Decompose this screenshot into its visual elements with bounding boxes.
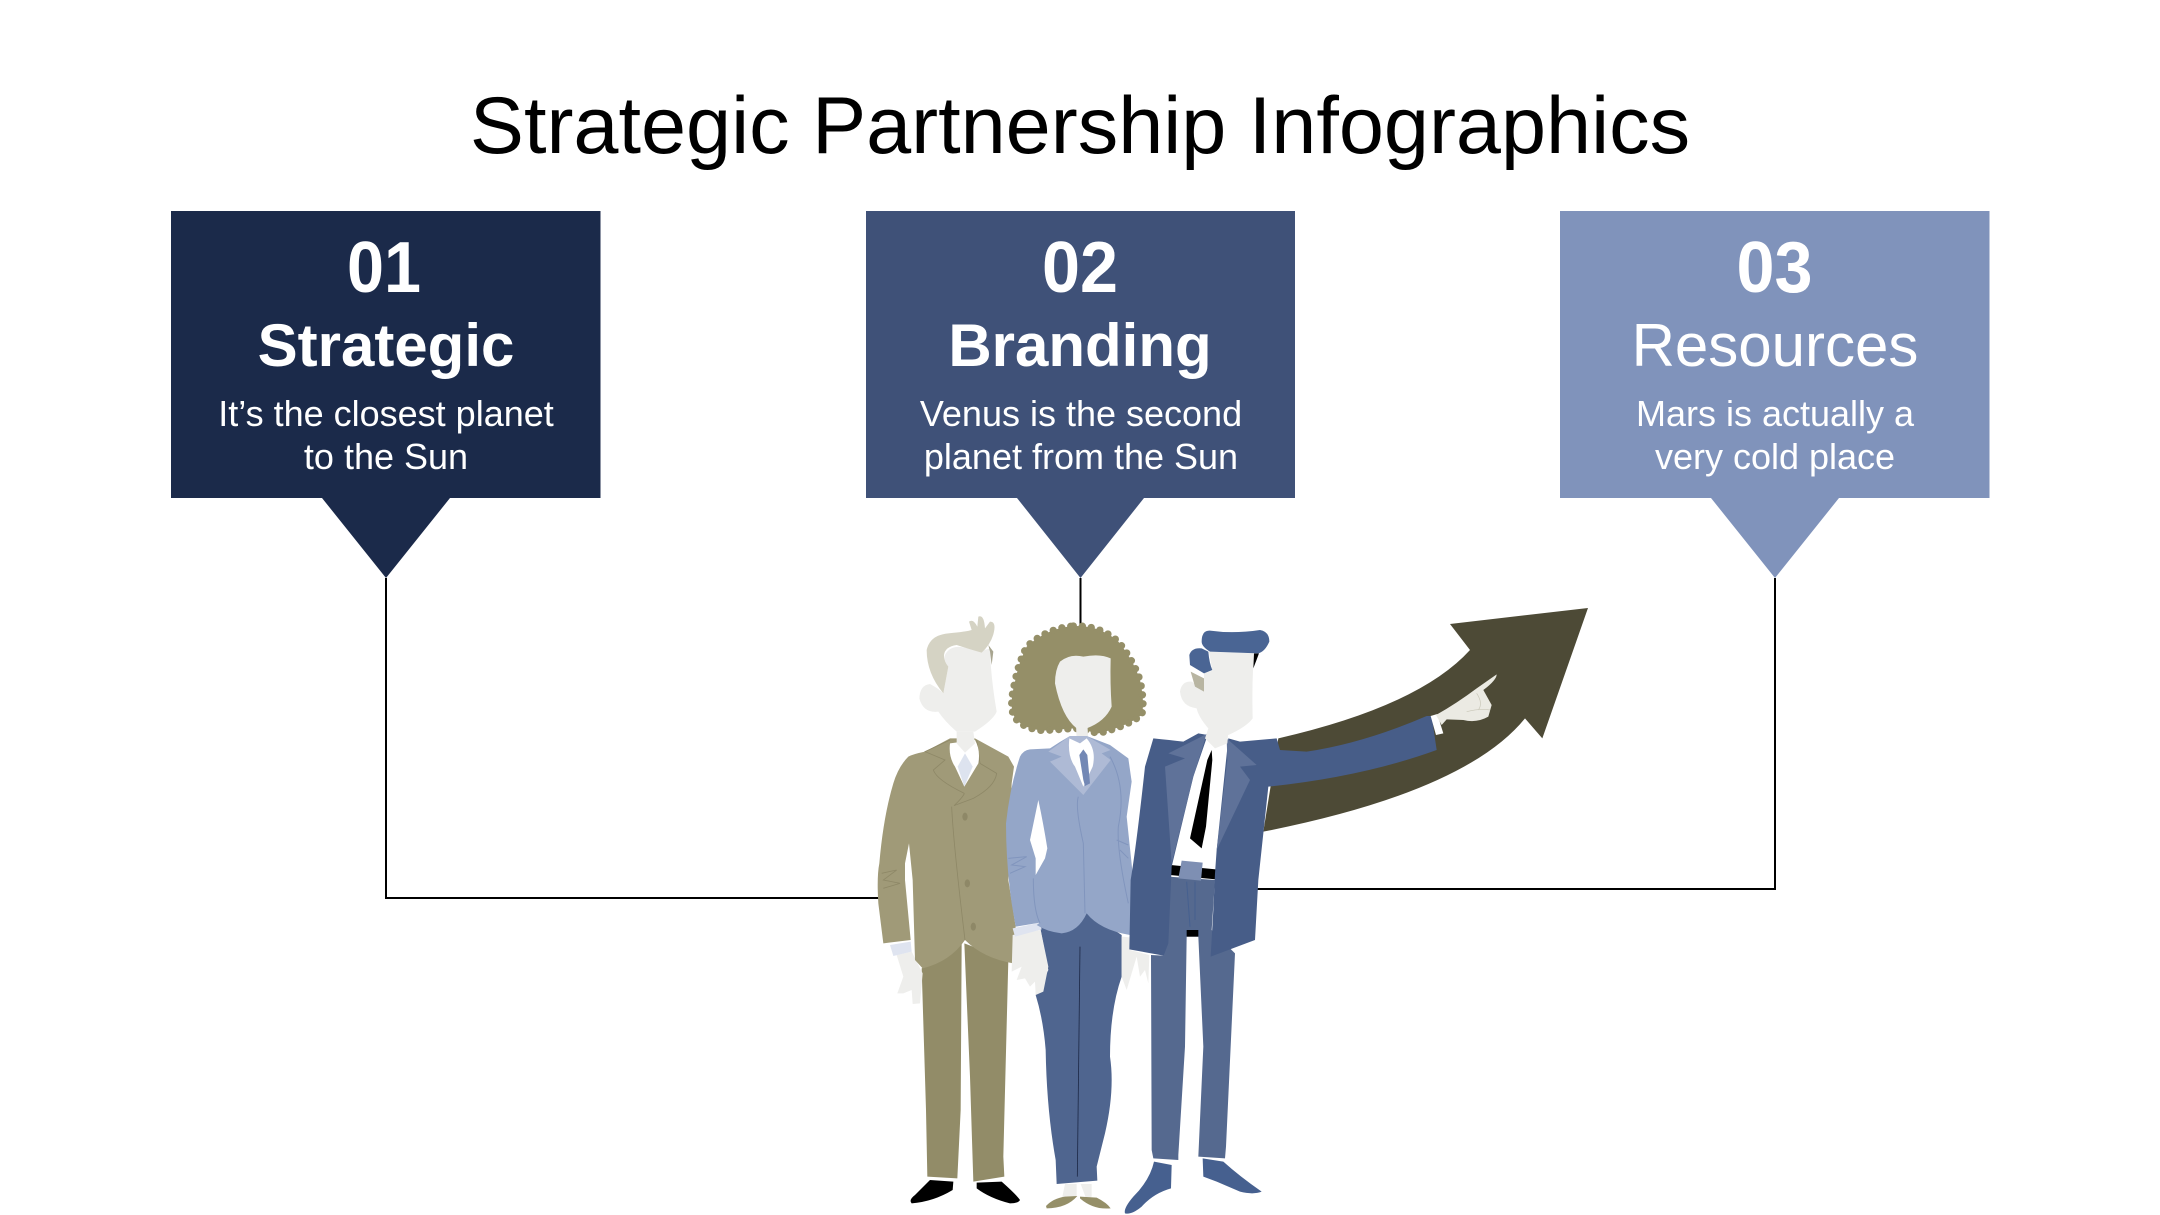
panel: 03 resources: very cold place	[1655, 436, 1895, 477]
panel: 02 branding: Branding	[948, 312, 1212, 379]
connector: resources to figures	[1240, 578, 1775, 889]
panel: 02 branding: planet from the Sun	[924, 436, 1238, 477]
panel: 03 resources: Mars is actually a	[1636, 393, 1915, 434]
figure: man in khaki suit	[878, 616, 1020, 1203]
panel: 01 strategic	[171, 211, 600, 578]
panel: 02 branding: Venus is the second	[920, 393, 1242, 434]
panel: 01 strategic: Strategic	[258, 312, 514, 379]
title: Strategic Partnership Infographics	[470, 81, 1690, 171]
panel: 03 resources	[1560, 211, 1990, 578]
panel: 01 strategic: 01	[347, 228, 421, 308]
connector: strategic to figures	[386, 578, 890, 898]
panel: 01 strategic: to the Sun	[304, 436, 468, 477]
panel: 03 resources: 03	[1736, 228, 1812, 308]
panel: 03 resources: Resources	[1632, 312, 1918, 379]
panel: 01 strategic: It’s the closest planet	[218, 393, 554, 434]
panel: 02 branding: 02	[1042, 228, 1118, 308]
panel: 02 branding	[866, 211, 1295, 578]
connector: branding to figures	[1080, 578, 1082, 640]
illustration: three business people and arrow	[878, 608, 1588, 1214]
figure: man pointing at arrow	[1125, 630, 1497, 1214]
icon: rising arrow	[1263, 608, 1588, 832]
figure: woman in blue suit	[1006, 626, 1149, 1209]
